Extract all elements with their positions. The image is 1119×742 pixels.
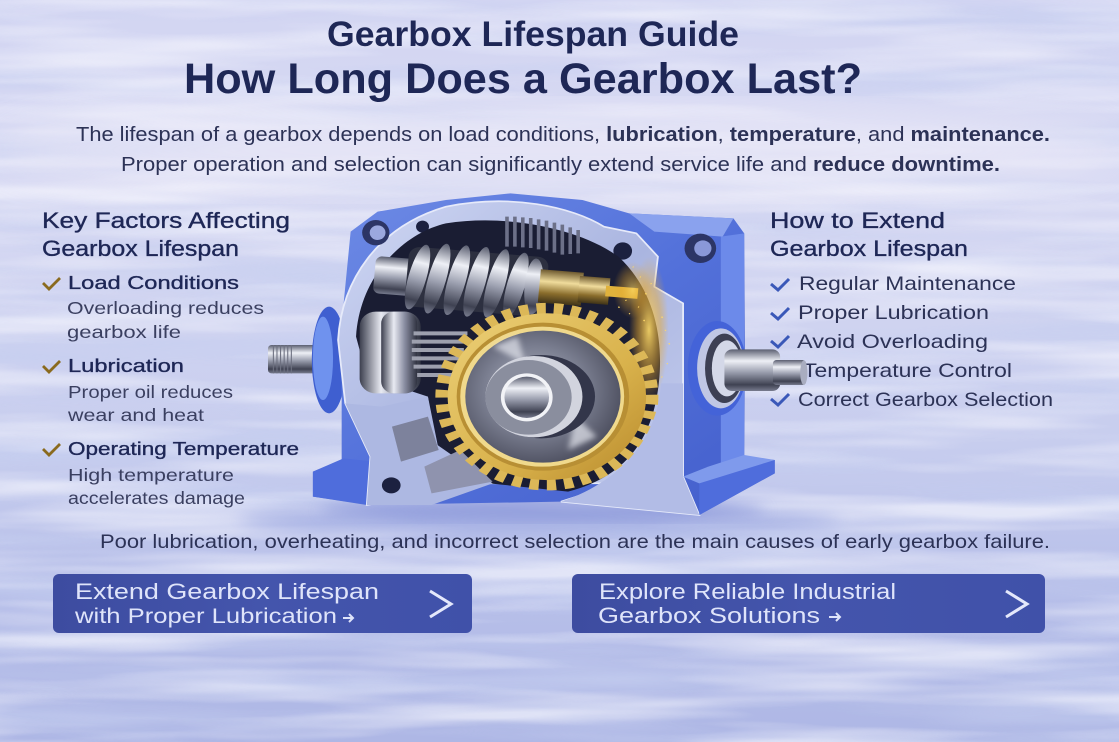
worm shaft — [371, 237, 641, 332]
title block — [184, 15, 862, 103]
disc highlights — [493, 337, 597, 450]
icon: small arrow — [343, 614, 353, 622]
lower bracket — [345, 397, 493, 505]
panel: how to extend: Gearbox Lifespan — [770, 236, 968, 261]
factor: load conditions — [43, 273, 264, 342]
button: lubrication: Extend Gearbox Lifespan — [75, 579, 379, 604]
right output shaft — [688, 321, 807, 416]
checklist: Correct Gearbox Selection — [798, 389, 1053, 411]
factor: operating temperature: High temperature — [68, 465, 234, 485]
button: solutions: Gearbox Solutions — [598, 603, 820, 628]
mounting holes — [362, 220, 716, 505]
title line 2: How Long Does a Gearbox Last? — [184, 55, 862, 103]
title line 1: Gearbox Lifespan Guide — [327, 15, 739, 54]
factor: operating temperature: Operating Temperature — [68, 439, 299, 459]
checklist: Regular Maintenance — [799, 273, 1016, 295]
checklist: Proper Lubrication — [798, 302, 989, 324]
hub — [487, 355, 595, 438]
checklist — [771, 273, 1053, 411]
pinion ridges — [412, 333, 467, 375]
button: lubrication: with Proper Lubrication — [74, 605, 337, 628]
icon: chevron — [1006, 591, 1027, 617]
gear teeth — [442, 309, 651, 485]
top bevel and side strip — [629, 213, 733, 237]
left input shaft — [268, 307, 346, 413]
illustration: cutaway worm gearbox — [268, 193, 807, 522]
factor: load conditions: Overloading reduces — [67, 298, 264, 318]
right base — [699, 457, 775, 515]
heading: key factors: Key Factors Affecting — [42, 208, 290, 233]
intro paragraph — [76, 124, 1050, 176]
factor: operating temperature — [43, 439, 299, 508]
checklist: Temperature Control — [803, 360, 1012, 382]
intro line 2: Proper operation and selection can significantly extend service life and reduce downtime. — [121, 154, 1000, 176]
rear blue housing — [313, 193, 775, 515]
silver front plate — [338, 201, 699, 515]
rear ribs — [507, 217, 578, 255]
worm wheel gear — [442, 309, 651, 485]
icon: chevron — [430, 591, 451, 617]
factor: lubrication: wear and heat — [67, 405, 204, 425]
button: solutions: Explore Reliable Industrial — [599, 579, 896, 604]
lower bearing — [360, 312, 421, 393]
checklist: Avoid Overloading — [797, 331, 988, 353]
panel: key factors: Gearbox Lifespan — [42, 236, 239, 261]
factor: lubrication: Lubrication — [68, 356, 184, 376]
icon: small arrow — [829, 613, 840, 621]
button: lubrication — [53, 574, 472, 633]
heading: how to extend: How to Extend — [770, 208, 945, 233]
left base foot — [313, 458, 374, 505]
warning sentence: Poor lubrication, overheating, and incorrect selection are the main causes of early gearbox failure. — [100, 531, 1050, 553]
gold ring — [457, 323, 629, 471]
gear right housing edge — [561, 383, 699, 515]
button: solutions — [572, 574, 1045, 633]
steel disc — [465, 331, 621, 463]
bore — [501, 373, 553, 421]
dark cavity — [356, 220, 660, 492]
factor: load conditions: Load Conditions — [68, 273, 239, 293]
panel: key factors — [42, 208, 299, 508]
panel: how to extend — [770, 208, 1053, 411]
factor: lubrication — [43, 356, 233, 425]
golden sparks — [613, 257, 670, 403]
factor: load conditions: gearbox life — [67, 322, 181, 342]
factor: lubrication: Proper oil reduces — [68, 382, 233, 402]
intro line 1: The lifespan of a gearbox depends on load conditions, lubrication , temperature , and maintenance. — [76, 124, 1050, 146]
factor: operating temperature: accelerates damage — [68, 488, 245, 508]
